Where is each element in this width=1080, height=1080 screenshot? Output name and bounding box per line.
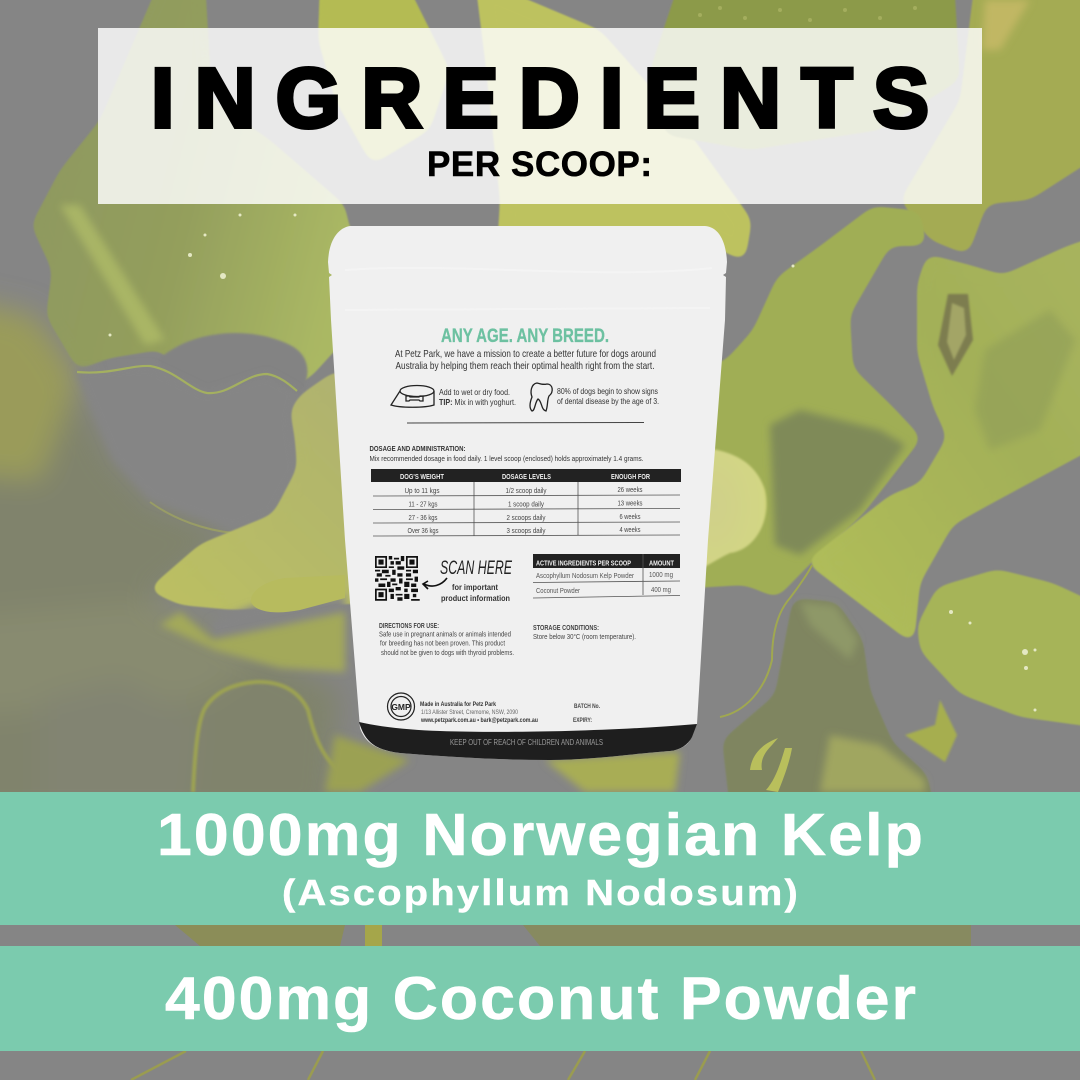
left muted kelp area [0,290,340,820]
scan here lettering: SCAN HERE [440,558,512,579]
dosage text [370,444,644,463]
icon: tooth [530,383,552,411]
directions for use [379,621,514,657]
top right frond [900,0,1080,255]
dosage table: ENOUGH FOR [611,474,650,481]
top right yellow tip [982,0,1030,50]
droplets on top frond [698,6,917,22]
dosage table: 1/2 scoop daily [506,488,547,495]
yellow band behind pouch top [475,0,752,262]
active ingredients table: 1000 mg [649,572,673,579]
active ingredients table: Ascophyllum Nodosum Kelp Powder [536,573,635,580]
frond dark centre [770,410,905,555]
thin leaf outline [720,565,812,717]
dark streak [210,596,345,638]
top-left frond [31,0,380,395]
lower arch [193,682,345,792]
batch and expiry: EXPIRY: [573,717,592,724]
olive triangle [905,700,957,762]
dosage table: 26 weeks [618,487,643,494]
dental text [557,386,659,406]
yellow leaf beside pouch [147,372,390,610]
batch and expiry [573,703,600,724]
batch and expiry: BATCH No. [574,703,600,710]
storage conditions: STORAGE CONDITIONS: [533,623,599,632]
manufacturer details: Made in Australia for Petz Park [420,701,496,708]
bowl tip text: TIP: Mix in with yoghurt. [439,397,516,407]
directions for use: DIRECTIONS FOR USE: [379,621,439,630]
dosage table: DOSAGE LEVELS [502,474,551,481]
right big leaf [805,235,1080,645]
dosage table: 4 weeks [620,527,641,534]
lower leaf base [820,735,925,792]
lower right leaf [917,569,1080,728]
banner: Norwegian Kelp: (Ascophyllum Nodosum) [282,872,800,913]
divider [407,422,644,424]
scan caption: product information [441,593,510,603]
bottom strip lines [131,1051,875,1080]
dosage table [371,469,681,536]
banner: Coconut Powder [0,946,1080,1051]
intro paragraph [395,348,656,372]
banner: Norwegian Kelp: 1000mg Norwegian Kelp [157,802,925,868]
bottom-left olive under pouch [325,735,410,792]
centre-right frond [660,206,927,598]
dosage table: Over 36 kgs [408,528,439,535]
dosage table: 13 weeks [618,500,643,508]
banner: Coconut Powder: 400mg Coconut Powder [165,965,918,1032]
frond highlight streak [60,205,165,345]
frond edge line [77,366,297,393]
dosage table: Up to 11 kgs [404,488,440,495]
manufacturer details: www.petzpark.com.au • bark@petzpark.com.au [420,717,538,724]
warning text: KEEP OUT OF REACH OF CHILDREN AND ANIMALS [450,738,603,747]
active ingredients table: Coconut Powder [536,588,581,595]
intro paragraph: At Petz Park, we have a mission to create a better future for dogs around [395,348,656,360]
title: INGREDIENTS [151,51,929,145]
subtitle: PER SCOOP: [427,145,652,184]
active ingredients table: ACTIVE INGREDIENTS PER SCOOP [536,560,631,568]
pouch black base [359,722,697,760]
dosage table: DOG'S WEIGHT [400,474,445,481]
product pouch back [328,226,727,760]
top centre yellow blob [318,0,450,165]
dosage table: 3 scoops daily [506,528,546,535]
dosage table: 11 - 27 kgs [408,502,438,508]
storage conditions: Store below 30°C (room temperature). [533,632,636,641]
pouch crease [345,268,712,310]
dosage table: 1 scoop daily [508,502,544,508]
bowl tip text: Add to wet or dry food. [439,387,510,397]
dental text: 80% of dogs begin to show signs [557,386,658,396]
leaf dark patch [975,310,1075,450]
icon: GMP badge: GMP [391,702,411,712]
yellow patch under pouch [545,752,680,792]
scan caption: for important [452,582,498,592]
central gray hole [158,333,307,395]
lower cavity [75,366,297,530]
dosage text: DOSAGE AND ADMINISTRATION: [370,444,466,453]
headline: ANY AGE. ANY BREED. [441,326,609,347]
storage conditions [533,623,636,641]
icon: food bowl [391,386,434,407]
directions for use: Safe use in pregnant animals or animals intended [379,630,511,638]
dosage table: 27 - 36 kgs [408,515,438,522]
directions for use: for breeding has not been proven. This product [380,638,506,648]
arrow to QR [423,578,447,589]
active ingredients table: AMOUNT [649,560,675,568]
intro paragraph: Australia by helping them reach their optimal health right from the start. [396,360,654,372]
directions for use: should not be given to dogs with thyroid problems. [381,648,514,657]
dosage table: 6 weeks [620,514,641,521]
active ingredients table [533,554,680,598]
manufacturer details: 1/13 Allister Street, Cremorne, NSW, 2090 [421,709,518,716]
banner: Norwegian Kelp [0,792,1080,925]
strip between bars [175,925,345,946]
lower leaf top highlight [800,602,858,660]
pouch body [328,226,727,760]
yellow curls [750,738,792,792]
dosage text: Mix recommended dosage in food daily. 1 level scoop (enclosed) holds approximately 1.4 grams. [370,454,644,463]
manufacturer details [420,701,538,724]
leaf lower band [160,612,345,672]
title panel [98,28,982,204]
active ingredients table: 400 mg [651,587,671,594]
top right dotted green frond [650,0,960,150]
bowl tip text [439,387,516,407]
dental text: of dental disease by the age of 3. [557,396,659,406]
pale round leaf [680,446,767,580]
scan caption [441,582,510,603]
lower centre leaf [722,598,935,810]
QR code [375,556,420,601]
icon: GMP badge [388,693,414,720]
brown spot [938,294,973,376]
lower curved leaf edge [150,502,233,533]
dosage table: 2 scoops daily [506,515,546,522]
oval flap [251,575,345,612]
water droplets [108,214,1036,712]
